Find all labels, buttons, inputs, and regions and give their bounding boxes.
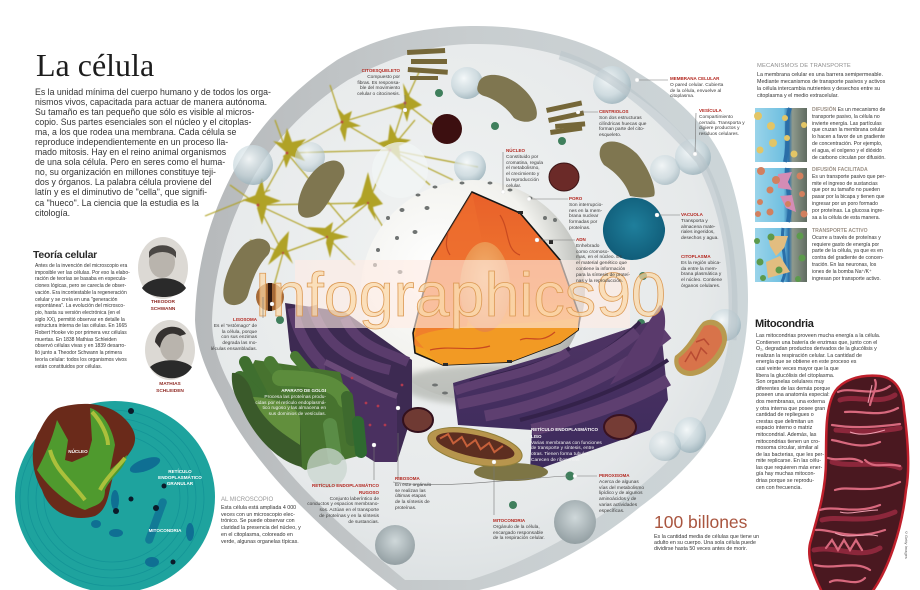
- credit: ©Getty Images: [904, 530, 909, 559]
- text: Teoría celular: imposible ver las células. Por eso la elabo-: [35, 270, 130, 276]
- text: difusión: de concentración. Por ejemplo,: [812, 141, 882, 147]
- text: 100 billones: adulto en su cuerpo. Una sola célula puede: [654, 540, 756, 546]
- label: vesícula: digiere productos y: [699, 126, 740, 131]
- text: Teoría celular: pio, hasta su versión electrónica (en el: [35, 310, 120, 316]
- heading: Teoría celular: Teoría celular: [33, 249, 97, 261]
- centrioles: [407, 48, 585, 135]
- label: ribosoma: En este orgánulo: [395, 483, 431, 488]
- label: vacuola: almacena mate-: [681, 225, 715, 230]
- intro text: Su tamaño es tan pequeño que sólo es visible al micros-: [35, 107, 254, 117]
- text: Teoría celular: teoría celular: todos los organismos vivos: [35, 357, 127, 363]
- text: al microscopio: AL MICROSCOPIO: [221, 497, 273, 503]
- caption: Mathias Schleiden: [156, 382, 184, 394]
- label: peroxisoma: Acerca de algunas: [599, 480, 639, 485]
- label: retículo endoplasmático rugoso: [307, 483, 379, 525]
- text: Mitocondria: espacio interno o matriz: [756, 425, 812, 431]
- text: Mitocondria: poseen una anatomía especial:: [756, 392, 830, 398]
- text: mecanismos intro: la célula intercambia nutrientes y desechos entre su: [757, 86, 880, 92]
- brown organelle: [549, 163, 579, 191]
- label: núcleo: [506, 148, 543, 189]
- label: retículo endoplasmático rugoso: sos. Actúan en el transporte: [320, 508, 379, 513]
- label: ADN: nas y la reproducción.: [576, 279, 623, 284]
- text: Mitocondria: mitocondrias tienen un cro-: [756, 438, 820, 444]
- intro text: copio. Sus partes esenciales son el núcleo y el citoplas-: [35, 117, 251, 127]
- text: Mitocondria: gía hay muchas mitocon-: [756, 471, 815, 477]
- text: Mitocondria: Las mitocondrias proveen mucha energía a la célula.: [756, 333, 880, 339]
- label: ADN: mas, en el núcleo. Es: [576, 255, 622, 260]
- text: al microscopio: en el citoplasma, coloreado en: [221, 532, 293, 538]
- label: retículo endoplasmático rugoso: de sustancias.: [348, 520, 379, 525]
- label: vesícula: VESÍCULA: [699, 108, 722, 113]
- text: Teoría celular: espontánea". La evolución del microsco-: [35, 303, 125, 309]
- leader lines and markers: [263, 80, 696, 515]
- text: difusión facilitada: pasar por la bicapa y tienen que: [812, 194, 884, 200]
- label: aparato de Golgi: Procesa las proteínas produ-: [264, 395, 326, 400]
- label: vacuola: Transporta y: [681, 219, 708, 224]
- watermark band: [295, 260, 630, 328]
- label: peroxisoma: PEROXISOMA: [599, 473, 630, 478]
- right mitochondrion: [674, 320, 727, 376]
- text: Teoría celular: ciones lógicas, pero se carecía de obser-: [35, 283, 126, 289]
- label: núcleo: el metabolismo,: [506, 166, 540, 171]
- red-brown organelles: [403, 408, 636, 439]
- transport illustration: diffusion: [754, 108, 807, 162]
- label: vacuola: desechos y agua.: [681, 236, 719, 241]
- label: citoplasma: [681, 254, 722, 289]
- label: vesícula: residuos celulares.: [699, 132, 739, 137]
- micrograph label: retículo: GRANULAR: [167, 481, 193, 486]
- label: retículo endoplasmático rugoso: Conjunto laberíntico de: [330, 497, 379, 502]
- label: ADN: contiene la información: [576, 267, 625, 272]
- label: citoplasma: Es la región ubica-: [681, 261, 721, 266]
- label: lisosoma: con sus enzimas: [221, 335, 257, 340]
- micrograph label: retículo: ENDOPLASMÁTICO: [158, 475, 202, 480]
- label: mitocondria: encargado responsable: [493, 531, 543, 536]
- text: al microscopio: trónico. Se puede observar con: [221, 518, 295, 524]
- text: Mitocondria: mosoma circular, similar al: [756, 445, 818, 451]
- text: transporte activo: tración. En las neuronas, los: [812, 262, 876, 268]
- text: Teoría celular: observó células vivas y en 1839 desarro-: [35, 343, 126, 349]
- micrograph label: retículo: RETÍCULO: [168, 469, 192, 474]
- green dots: [276, 89, 647, 509]
- transport illustration: facilitated diffusion: [755, 167, 808, 222]
- label: ADN: el material genético que: [576, 261, 627, 266]
- text: Teoría celular: Antes de la invención del microscopio era: [35, 263, 127, 269]
- text: Mitocondria: mitocondrial. Además, las: [756, 432, 816, 438]
- Golgi apparatus: [232, 356, 362, 488]
- label: núcleo: cromatina, regula: [506, 161, 543, 166]
- label: citoplasma: el núcleo. Contiene: [681, 278, 722, 283]
- cell body with membrane: [195, 26, 748, 590]
- vacuole: [603, 198, 665, 260]
- text: difusión: lo hacen a favor de un gradiente: [812, 134, 885, 140]
- label: citoesqueleto: CITOESQUELETO: [362, 68, 400, 73]
- label: ADN: [576, 237, 630, 284]
- label: centriolos: forman parte del cito-: [599, 127, 644, 132]
- label: ADN: como cromoso-: [576, 250, 609, 255]
- text: transporte activo: requiere gasto de energía por: [812, 242, 879, 248]
- micrograph label: mitocondria: MITOCONDRIA: [149, 528, 181, 533]
- lower mitochondrion: [425, 420, 548, 481]
- label: retículo endoplasmático liso: [531, 427, 602, 463]
- text: Mitocondria: drias porque se reprodu-: [756, 478, 814, 484]
- text: Mitocondria: energía que se obtiene en este proceso es: [756, 359, 856, 365]
- text: transporte activo: iones de la bomba Na⁺/K⁺: [812, 269, 872, 275]
- label: citoplasma: brana plasmática y: [681, 272, 721, 277]
- text: Mitocondria: y otra interna que posee gran: [756, 406, 825, 412]
- text: difusión facilitada: Es un transporte pasivo que per-: [812, 174, 886, 180]
- text: mecanismos intro: [757, 72, 886, 99]
- label: retículo endoplasmático liso: otras. Tienen forma tubular.: [531, 452, 589, 457]
- text: Mitocondria: mite replicarse. En las célu-: [756, 458, 821, 464]
- olive beans: [223, 75, 655, 305]
- label: núcleo: NÚCLEO: [506, 148, 525, 153]
- label: lisosoma: léculas ensambladas.: [211, 347, 257, 352]
- label: vacuola: [681, 212, 719, 241]
- heading: mecanismos de transporte: MECANISMOS DE TRANSPORTE: [757, 63, 851, 69]
- label: poro: proteínas.: [569, 226, 590, 231]
- label: retículo endoplasmático liso: Varias membranas con funciones: [531, 441, 602, 446]
- text: Mitocondria: O₂, degradan productos derivados de la glucólisis y: [756, 346, 877, 352]
- label: ribosoma: [395, 476, 432, 511]
- text: al microscopio: Esta célula está ampliada 4 000: [221, 505, 296, 511]
- watermark: Infographics90: [254, 261, 666, 330]
- label: aparato de Golgi: cidas por el retículo endoplasmá-: [255, 401, 326, 406]
- intro text: Es la unidad mínima del cuerpo humano y de todos los orga-: [35, 87, 271, 97]
- text: transporte activo: [812, 228, 884, 282]
- micrograph label: núcleo: NÚCLEO: [68, 449, 88, 454]
- text: Mitocondria: de las bacterias, que les per-: [756, 452, 824, 458]
- label: ADN: Enhebrado: [576, 244, 599, 249]
- label: peroxisoma: varias actividades: [599, 503, 637, 508]
- text: transporte activo: contra del gradiente de concen-: [812, 255, 884, 261]
- caption: Theodor Schwann: THEODOR: [151, 300, 175, 305]
- label: mitocondria: [493, 518, 545, 541]
- label: retículo endoplasmático liso: Carecen de ribosomas.: [531, 458, 581, 463]
- dark red organelle: [432, 114, 462, 144]
- label: aparato de Golgi: APARATO DE GOLGI: [281, 388, 326, 393]
- label: ADN: ADN: [576, 237, 586, 242]
- label: aparato de Golgi: [255, 388, 326, 417]
- text: difusión: que cruzan la membrana celular: [812, 127, 885, 133]
- intro text: [35, 87, 271, 218]
- label: vesícula: cerrado. Transporta y: [699, 121, 745, 126]
- text: Teoría celular: siglo XX), permitió observar en detalle la: [35, 317, 125, 323]
- text: difusión facilitada: DIFUSIÓN FACILITADA: [812, 167, 868, 173]
- text: al microscopio: veces con un microscopio elec-: [221, 512, 295, 518]
- caption: Theodor Schwann: SCHWANN: [151, 306, 175, 312]
- label: membrana celular: MEMBRANA CELULAR: [670, 76, 719, 81]
- text: Mitocondria: cen con frecuencia.: [756, 485, 802, 491]
- intro text: ca "hueco". La ciencia que la estudia es la: [35, 198, 199, 208]
- text: difusión facilitada: sa a la célula de esta manera.: [812, 215, 880, 221]
- text: Teoría celular: [35, 263, 130, 370]
- text: Mitocondria: casi veinte veces mayor que la que: [756, 366, 839, 372]
- portrait: Theodor Schwann: [138, 237, 188, 299]
- label: citoesqueleto: celular o citocinesis.: [357, 92, 400, 97]
- text: Teoría celular: estructura interna de las células. En 1665: [35, 323, 127, 329]
- text: difusión: invierte energía. Las partículas: [812, 121, 882, 127]
- caption: Mathias Schleiden: MATHIAS: [159, 382, 181, 387]
- text: difusión facilitada: [812, 166, 886, 221]
- text: difusión: DIFUSIÓN Es un mecanismo de: [812, 107, 885, 113]
- label: mitocondria: MITOCONDRIA: [493, 518, 525, 523]
- text: mecanismos intro: Mediante mecanismos de transporte pasivos y activos: [757, 79, 885, 85]
- label: ADN: para la síntesis de proteí-: [576, 273, 630, 278]
- label: citoesqueleto: ble del movimiento: [360, 86, 400, 91]
- label: mitocondria: Orgánulo de la célula,: [493, 525, 540, 530]
- label: núcleo: el crecimiento y: [506, 172, 539, 177]
- label: núcleo: la reproducción: [506, 178, 539, 183]
- text: difusión: transporte pasivo, la célula no: [812, 114, 880, 120]
- text: al microscopio: [221, 496, 301, 545]
- label: lisosoma: LISOSOMA: [233, 317, 257, 322]
- label: poro: PORO: [569, 196, 582, 201]
- micrograph: cell under microscope: [15, 401, 215, 590]
- big figure: 100 billones: 100 billones: [654, 512, 747, 532]
- label: núcleo: Constituido por: [506, 155, 538, 160]
- intro text: latín y es el diminutivo de "cella", que signifi-: [35, 187, 207, 197]
- lysosome: [256, 283, 284, 311]
- label: ribosoma: se realizan las: [395, 489, 426, 494]
- label: membrana celular: [670, 76, 724, 99]
- text: Teoría celular: están constituidos por células.: [35, 364, 102, 370]
- label: retículo endoplasmático rugoso: conductos y espacios membrano-: [307, 502, 379, 507]
- label: centriolos: cilíndricas huecas que: [599, 122, 646, 127]
- text: difusión: el agua, el oxígeno y el dióxido: [812, 148, 882, 154]
- text: difusión: [812, 106, 886, 161]
- text: 100 billones: [654, 534, 759, 552]
- label: aparato de Golgi: tico rugoso y las almacena en: [263, 406, 326, 411]
- label: vacuola: riales ingeridos,: [681, 230, 715, 235]
- vesicles: [233, 66, 741, 565]
- intro text: de una sola célula. Pero en seres como el huma-: [35, 157, 225, 167]
- label: poro: formadas por: [569, 220, 597, 225]
- intro text: dos y órganos. La palabra célula proviene del: [35, 177, 212, 187]
- text: transporte activo: Ocurre a través de proteínas y: [812, 235, 881, 241]
- label: poro: brana nuclear: [569, 214, 598, 219]
- label: retículo endoplasmático rugoso: de proteínas y en la síntesis: [319, 514, 379, 519]
- label: ribosoma: proteínas.: [395, 506, 416, 511]
- label: retículo endoplasmático rugoso: RETÍCULO ENDOPLASMÁTICO: [312, 483, 379, 488]
- label: peroxisoma: lipídico y de algunos: [599, 491, 642, 496]
- label: ribosoma: últimas etapas: [395, 494, 426, 499]
- text: difusión facilitada: por proteínas. La glucosa ingre-: [812, 208, 884, 214]
- text: Mitocondria: las que requieren más ener-: [756, 465, 822, 471]
- label: retículo endoplasmático liso: RETÍCULO ENDOPLASMÁTICO: [531, 427, 598, 432]
- text: mecanismos intro: citoplasma y el medio extracelular.: [757, 93, 839, 99]
- label: poro: nes en la mem-: [569, 209, 602, 214]
- text: Teoría celular: muertas. En 1838 Mathias Schleiden: [35, 337, 117, 343]
- text: difusión: de carbono circulan por difusión.: [812, 155, 886, 161]
- text: Teoría celular: celular y se creía en una "generación: [35, 297, 117, 303]
- label: membrana celular: O pared celular. Cubierta: [670, 83, 723, 88]
- text: difusión facilitada: mite el ingreso de sustancias: [812, 181, 878, 187]
- label: vesícula: [699, 108, 745, 137]
- label: poro: Son interrupcio-: [569, 203, 603, 208]
- text: 100 billones: Es la cantidad media de células que tiene un: [654, 534, 759, 540]
- text: transporte activo: ingresan por transporte activo.: [812, 276, 881, 282]
- text: Mitocondria: Son organelas celulares muy: [756, 379, 824, 385]
- title: La célula: [36, 47, 154, 83]
- label: lisosoma: degrada las mo-: [222, 341, 257, 346]
- nucleus: [361, 180, 585, 405]
- text: al microscopio: verde, algunas organelas típicas.: [221, 539, 299, 545]
- label: mitocondria: de la respiración celular.: [493, 536, 545, 541]
- label: citoesqueleto: [357, 68, 400, 97]
- intro text: mado mitosis. Hay en el reino animal organismos: [35, 147, 226, 157]
- label: centriolos: [599, 109, 646, 138]
- text: Mitocondria: cantidad de repliegues o: [756, 412, 814, 418]
- text: Teoría celular: Robert Hooke vio por primera vez células: [35, 330, 127, 336]
- text: Mitocondria: Contienen una batería de enzimas que, junto con el: [756, 340, 877, 346]
- text: difusión facilitada: que por su tamaño no pueden: [812, 187, 880, 193]
- caption: Mathias Schleiden: SCHLEIDEN: [156, 388, 184, 394]
- text: mecanismos intro: La membrana celular es una barrera semipermeable.: [757, 72, 883, 78]
- label: peroxisoma: vías del metabolismo: [599, 486, 644, 491]
- text: Mitocondria: crestas que delimitan un: [756, 419, 813, 425]
- text: transporte activo: parte de la célula, ya que es en: [812, 248, 883, 254]
- label: lisosoma: la célula, porque: [222, 330, 257, 335]
- label: núcleo: celular.: [506, 184, 521, 189]
- text: Mitocondria: dos membranas, una externa: [756, 399, 825, 405]
- intro text: ma, a los que rodea una membrana. Cada célula se: [35, 127, 236, 137]
- label: citoesqueleto: Compuesto por: [367, 75, 400, 80]
- text: Mitocondria: diferentes de las demás porque: [756, 386, 830, 392]
- label: aparato de Golgi: sus dominios de vesículas.: [269, 412, 326, 417]
- intro text: nismos vivos, capacitada para actuar de manera autónoma.: [35, 97, 267, 107]
- text: transporte activo: TRANSPORTE ACTIVO: [812, 228, 868, 234]
- label: peroxisoma: específicas.: [599, 509, 624, 514]
- label: ribosoma: de la síntesis de: [395, 500, 430, 505]
- label: retículo endoplasmático liso: LISO: [531, 434, 542, 439]
- smooth endoplasmic reticulum: [453, 305, 668, 472]
- text: Mitocondria: [756, 333, 880, 491]
- text: Mitocondria: realizan la respiración celular. La cantidad de: [756, 353, 862, 359]
- text: 100 billones: dividirse hasta 50 veces antes de morir.: [654, 546, 747, 552]
- intro text: citología.: [35, 208, 70, 218]
- label: centriolos: Son dos estructuras: [599, 116, 642, 121]
- text: difusión facilitada: ingresar por un poro formado: [812, 201, 878, 207]
- label: centriolos: esqueleto.: [599, 133, 621, 138]
- label: poro: [569, 196, 603, 231]
- intro text: no, su organización en millones constituye teji-: [35, 167, 216, 177]
- label: lisosoma: [211, 317, 257, 352]
- label: ribosoma: RIBOSOMA: [395, 476, 420, 481]
- transport illustration: active transport: [754, 228, 807, 282]
- label: vacuola: VACUOLA: [681, 212, 703, 217]
- text: Teoría celular: lló junto a Theodor Schwann la primera: [35, 350, 122, 356]
- label: membrana celular: citoplasma.: [670, 94, 694, 99]
- text: Mitocondria: libera la glucólisis del citoplasma.: [756, 373, 834, 379]
- label: vesícula: Compartimiento: [699, 115, 733, 120]
- label: lisosoma: Es el "estómago" de: [214, 324, 257, 329]
- label: citoplasma: da entre la mem-: [681, 267, 717, 272]
- label: citoplasma: órganos celulares.: [681, 284, 720, 289]
- text: Teoría celular: vación. Era incontestable la regeneración: [35, 290, 127, 296]
- label: peroxisoma: [599, 473, 644, 514]
- label: membrana celular: de la célula, envuelve al: [670, 89, 721, 94]
- heading: Mitocondria: Mitocondria: [755, 318, 813, 330]
- label: peroxisoma: aminoácidos y de: [599, 497, 636, 502]
- intro text: reproduce independientemente en un proceso lla-: [35, 137, 228, 147]
- cytoskeleton: [205, 70, 478, 300]
- label: citoplasma: CITOPLASMA: [681, 254, 711, 259]
- text: Teoría celular: ración de teorías se basaba en especula-: [35, 276, 127, 282]
- label: retículo endoplasmático rugoso: RUGOSO: [359, 490, 379, 495]
- micrograph label: retículo: [158, 468, 202, 486]
- mitochondrion photo: [809, 376, 908, 590]
- portrait: Mathias Schleiden: [145, 320, 195, 380]
- caption: Theodor Schwann: [150, 300, 175, 312]
- translucent membrane ridge: [560, 55, 733, 340]
- label: centriolos: CENTRIOLOS: [599, 109, 629, 114]
- text: al microscopio: claridad la presencia del núcleo, y: [221, 525, 301, 531]
- label: retículo endoplasmático liso: de transporte y síntesis, entre: [531, 446, 594, 451]
- label: citoesqueleto: fibras. Es responsa-: [357, 81, 400, 86]
- rough endoplasmic reticulum: [285, 303, 412, 462]
